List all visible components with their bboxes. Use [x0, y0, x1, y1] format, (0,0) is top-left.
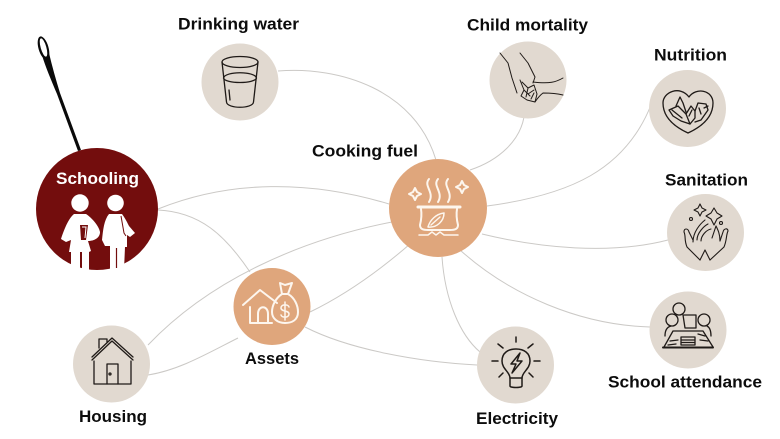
icon: house and money bag: [243, 283, 298, 323]
panel: assets: [234, 268, 310, 345]
panel: nutrition: [649, 70, 726, 147]
icon: glass of water: [222, 56, 258, 107]
label: Electricity: Electricity: [476, 410, 558, 428]
panel: drinking water: [202, 44, 278, 120]
panel: electricity: [477, 326, 554, 404]
icon: students at a table: [663, 303, 713, 348]
panel: child mortality: [490, 42, 566, 118]
label: School attendance: School attendance: [608, 374, 762, 392]
label: Cooking fuel: Cooking fuel: [312, 142, 418, 160]
label: Assets: Assets: [245, 350, 299, 368]
icon: washing hands with sparkles: [684, 204, 728, 260]
icon: needle: [35, 35, 81, 151]
panel: schooling: [36, 148, 158, 270]
connector lines: [148, 70, 668, 375]
icon: two students: [61, 194, 135, 270]
label: Nutrition: Nutrition: [654, 46, 727, 64]
label: Drinking water: Drinking water: [178, 16, 300, 34]
panel: school attendance: [650, 292, 726, 368]
icon: steaming pot: [409, 179, 468, 235]
icon: light bulb with bolt: [492, 337, 540, 388]
icon: house: [92, 338, 133, 384]
panel: sanitation: [667, 194, 744, 271]
icon: heart with vegetables: [663, 91, 713, 133]
panel: cooking fuel: [389, 159, 487, 257]
panel: housing: [73, 326, 150, 402]
heading: Schooling: Schooling: [56, 170, 139, 188]
icon: hands: [500, 53, 563, 102]
label: Child mortality: Child mortality: [467, 16, 588, 34]
label: Housing: Housing: [79, 408, 147, 426]
label: Sanitation: Sanitation: [665, 172, 748, 190]
